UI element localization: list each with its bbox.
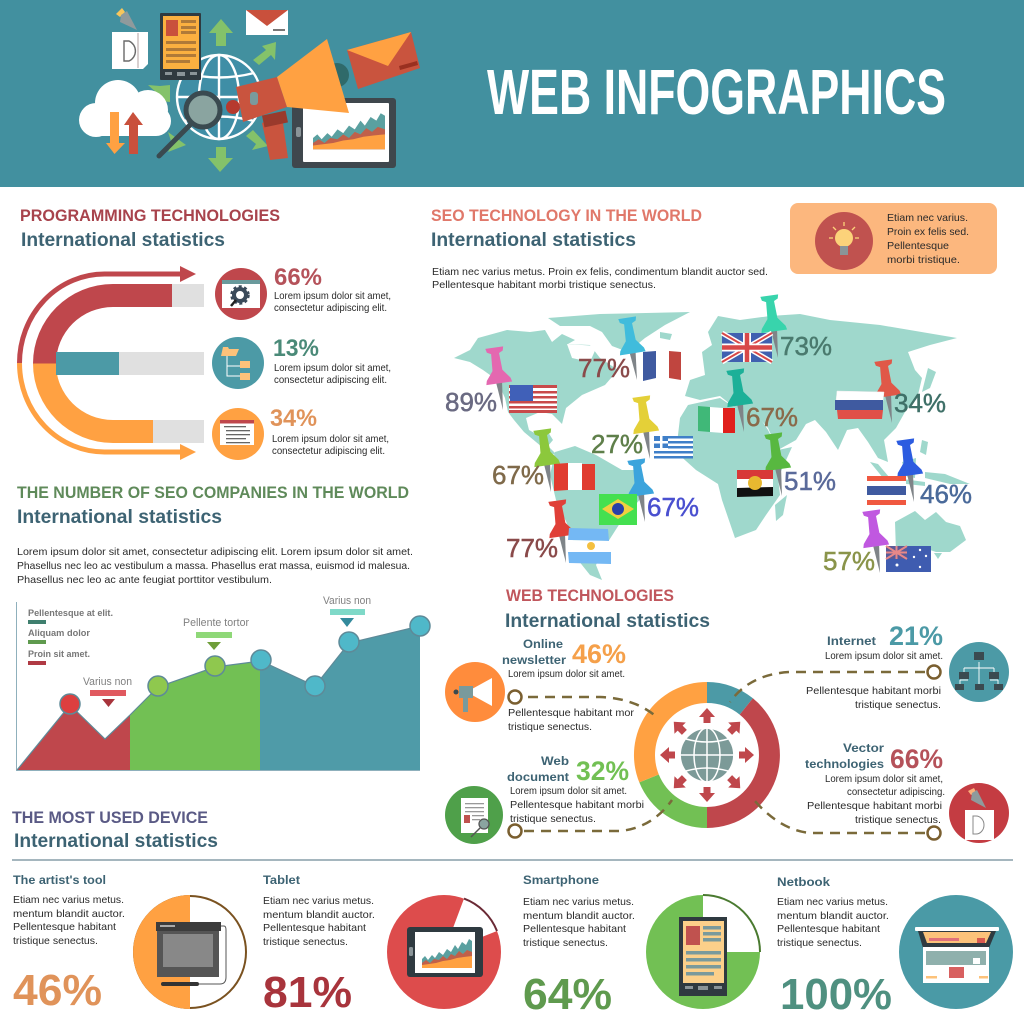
chart label: varius non (teal): Varius non [323, 595, 371, 607]
stat: 66%: consectetur adipiscing elit. [274, 302, 387, 314]
map percentages: 57% [823, 546, 875, 576]
icon: magnifier [159, 93, 220, 156]
map percentages: 27% [591, 429, 643, 459]
device: tablet text: mentum blandit auctor. [263, 909, 375, 921]
text: web document [507, 754, 644, 825]
device: netbook text: Etiam nec varius metus. [777, 896, 888, 908]
flag: Egypt [737, 470, 773, 497]
text: online newsletter: Pellentesque habitant mor [508, 707, 635, 719]
map percentages [445, 331, 972, 576]
map percentages: 67% [746, 402, 798, 432]
device: artist's tool text: mentum blandit auctor. [13, 908, 125, 920]
map percentages: 73% [780, 331, 832, 361]
panel: web technologies [445, 586, 1009, 844]
text: vector technologies: Pellentesque habitant morbi [807, 800, 942, 812]
pie: smartphone [646, 895, 760, 1009]
flag: Greece [654, 436, 693, 458]
icon: code window [212, 408, 264, 460]
device: smartphone text: mentum blandit auctor. [523, 910, 635, 922]
subheading: International statistics [505, 611, 710, 632]
legend [28, 608, 113, 665]
device: tablet text [263, 873, 375, 1017]
callout: Pellentesque [887, 240, 949, 252]
text: internet: Lorem ipsum dolor sit amet. [825, 650, 943, 662]
flag: Brazil [599, 494, 637, 525]
text: web document: tristique senectus. [510, 813, 596, 825]
device: smartphone text [523, 873, 635, 1019]
device: netbook text: tristique senectus. [777, 937, 862, 949]
device: netbook text: Pellentesque habitant [777, 923, 880, 935]
area chart [16, 595, 430, 770]
map percentages: 51% [784, 466, 836, 496]
text: web document: Lorem ipsum dolor sit amet. [510, 785, 627, 797]
text: internet: 21% [889, 621, 943, 651]
flag: Italy [698, 406, 735, 433]
flag: Thailand [867, 476, 906, 505]
description [17, 546, 413, 586]
callout: morbi tristique. [887, 254, 960, 266]
device: artist's tool text: tristique senectus. [13, 935, 98, 947]
text: online newsletter: newsletter [502, 653, 566, 667]
heading: WEB TECHNOLOGIES [506, 586, 674, 605]
heading: THE NUMBER OF SEO COMPANIES IN THE WORLD [17, 483, 409, 502]
icon: cloud with arrows [79, 80, 171, 154]
stat: 34%: consectetur adipiscing elit. [272, 445, 385, 457]
device: smartphone text: Pellentesque habitant [523, 923, 626, 935]
device: netbook text: 100% [780, 970, 892, 1019]
text: internet: Pellentesque habitant morbi [806, 685, 941, 697]
subheading: International statistics [21, 230, 225, 251]
chart label: varius non (red) [83, 676, 132, 707]
device: netbook text: mentum blandit auctor. [777, 910, 889, 922]
text: online newsletter: Online [523, 637, 563, 651]
heading: PROGRAMMING TECHNOLOGIES [20, 206, 280, 225]
pie: artist's tool with graphics tablet [133, 895, 246, 1009]
map percentages: 77% [506, 533, 558, 563]
stat: 13%: Lorem ipsum dolor sit amet, [274, 362, 391, 374]
chart label: varius non (teal) [323, 595, 371, 627]
text: online newsletter: 46% [572, 639, 626, 669]
device: smartphone text: Smartphone [523, 873, 599, 887]
pie: netbook [899, 895, 1013, 1009]
description: Phasellus nec leo ac ante feugiat porttitor vestibulum. [17, 574, 272, 586]
icon: pen and vector document [112, 8, 148, 69]
intro text [432, 266, 768, 291]
flag: Peru [554, 463, 595, 491]
stat: 66%: 66% [274, 264, 322, 291]
device: artist's tool text: Etiam nec varius metus. [13, 894, 124, 906]
text: vector technologies: Vector [843, 741, 884, 755]
callout: Proin ex felis sed. [887, 226, 969, 238]
text: internet [806, 621, 943, 711]
icon: megaphone [226, 39, 349, 160]
donut chart [634, 682, 780, 828]
text: web document: Web [541, 754, 569, 768]
text: online newsletter: tristique senectus. [508, 721, 592, 733]
intro text: Pellentesque habitant morbi tristique senectus. [432, 279, 656, 291]
subheading: International statistics [17, 507, 222, 528]
stat: 34% [270, 405, 389, 457]
icon: central globe with arrows [660, 708, 754, 802]
flag: USA [509, 385, 557, 413]
text: vector technologies: Lorem ipsum dolor sit amet, [825, 773, 943, 785]
subheading: International statistics [431, 230, 636, 251]
device: smartphone text: 64% [523, 970, 612, 1019]
text: online newsletter: Lorem ipsum dolor sit amet. [508, 668, 625, 680]
callout [790, 203, 997, 274]
flag: UK [722, 333, 772, 362]
icon: document circle [445, 786, 503, 844]
text: web document: 32% [576, 756, 629, 786]
legend: Proin sit amet. [28, 649, 90, 659]
text: vector technologies: 66% [890, 744, 943, 774]
device: tablet text: tristique senectus. [263, 936, 348, 948]
icon: megaphone circle [445, 662, 505, 722]
device: tablet text: Pellentesque habitant [263, 922, 366, 934]
map percentages: 89% [445, 387, 497, 417]
world map [454, 312, 970, 580]
panel: programming technologies [20, 206, 391, 460]
heading: SEO TECHNOLOGY IN THE WORLD [431, 206, 702, 225]
icon: small envelope [246, 10, 288, 35]
pie: tablet [387, 895, 501, 1009]
text: online newsletter [502, 637, 635, 733]
device: artist's tool text [13, 873, 125, 1015]
flag: Australia [886, 546, 931, 572]
device: tablet text: 81% [263, 968, 352, 1017]
panel: seo technology in the world [431, 203, 997, 580]
icon: vector pen circle [949, 783, 1009, 843]
stat: 13%: 13% [273, 335, 319, 362]
stat: 66% [274, 264, 391, 314]
icon: document phone [160, 13, 201, 80]
chart label: varius non (red): Varius non [83, 676, 132, 688]
device: artist's tool text: Pellentesque habitant [13, 921, 116, 933]
device: artist's tool text: 46% [13, 966, 102, 1015]
map percentages: 34% [894, 388, 946, 418]
text: vector technologies [805, 741, 945, 826]
connector lines [524, 672, 925, 833]
device: tablet text: Tablet [263, 873, 300, 887]
heading: THE MOST USED DEVICE [12, 808, 208, 827]
device: artist's tool text: The artist's tool [13, 873, 106, 887]
text: vector technologies: technologies [805, 757, 884, 771]
icon: tablet with chart [292, 98, 396, 168]
device: tablet text: Etiam nec varius metus. [263, 895, 374, 907]
flag: Russia [835, 391, 884, 419]
legend: Aliquam dolor [28, 628, 91, 638]
device: netbook text [777, 875, 892, 1019]
icon: big envelope [325, 32, 420, 89]
connector rings [508, 666, 940, 840]
header banner [0, 0, 1024, 187]
flag: France [643, 351, 681, 381]
text: web document: document [507, 770, 569, 784]
map percentages: 77% [578, 353, 630, 383]
device: smartphone text: tristique senectus. [523, 937, 608, 949]
subheading: International statistics [14, 831, 218, 852]
chart label: pellente tortor: Pellente tortor [183, 617, 249, 629]
stat: 13% [273, 335, 391, 386]
chart: horseshoe bars [20, 266, 204, 460]
map pins [481, 294, 927, 575]
text: vector technologies: tristique senectus. [855, 814, 941, 826]
description: Phasellus nec leo ac vestibulum a massa. Phasellus erat massa, euismod id malesua. [17, 560, 410, 572]
map percentages: 46% [920, 479, 972, 509]
description: Lorem ipsum dolor sit amet, consectetur adipiscing elit. Lorem ipsum dolor sit amet. [17, 546, 413, 558]
panel: most used device [12, 808, 1013, 1019]
text: vector technologies: consectetur adipiscing. [847, 786, 945, 798]
stat: 34%: 34% [270, 405, 317, 432]
map percentages: 67% [647, 492, 699, 522]
icon: network circle [949, 642, 1009, 702]
stat: 13%: consectetur adipiscing elit. [274, 374, 387, 386]
stat: 66%: Lorem ipsum dolor sit amet, [274, 290, 391, 302]
text: internet: Internet [827, 634, 876, 648]
text: web document: Pellentesque habitant morbi [510, 799, 644, 811]
device: smartphone text: Etiam nec varius metus. [523, 896, 634, 908]
flag: Argentina [568, 528, 611, 564]
legend: Pellentesque at elit. [28, 608, 113, 618]
chart label: pellente tortor [183, 617, 249, 650]
text: internet: tristique senectus. [855, 699, 941, 711]
panel: number of seo companies [16, 483, 430, 770]
device: netbook text: Netbook [777, 875, 830, 889]
icon: globe [177, 55, 261, 139]
stat: 34%: Lorem ipsum dolor sit amet, [272, 433, 389, 445]
icon: folder tree [212, 337, 264, 389]
map percentages: 67% [492, 460, 544, 490]
callout: Etiam nec varius. [887, 212, 968, 224]
intro text: Etiam nec varius metus. Proin ex felis, condimentum blandit auctor sed. [432, 266, 768, 278]
icon: gear window [215, 268, 267, 320]
icon: green arrows around globe [148, 19, 276, 172]
